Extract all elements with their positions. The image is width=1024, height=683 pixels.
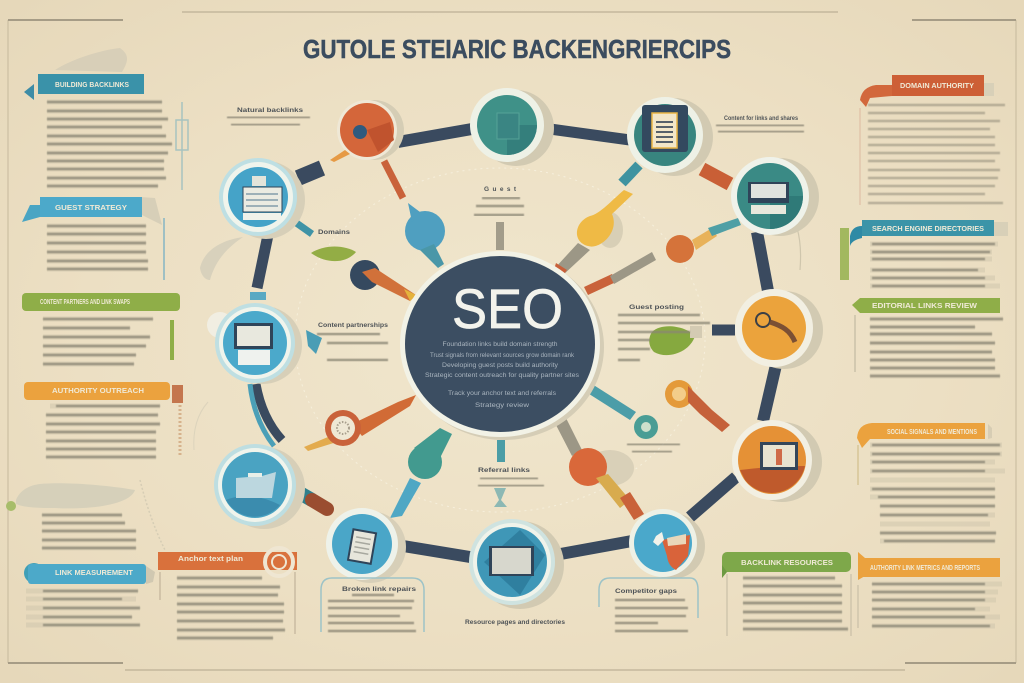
spoke: clock node xyxy=(304,395,416,451)
panel: green left: CONTENT PARTNERS AND LINK SWAPS xyxy=(40,299,130,306)
SEO body text: Developing guest posts build authority xyxy=(442,362,559,369)
panel: grey left xyxy=(6,480,165,550)
title: GUTOLE STEIARIC BACKENGRIERCIPS xyxy=(303,36,731,64)
panel: bottom box left xyxy=(321,578,424,632)
panel: red top right xyxy=(860,75,1005,205)
SEO body text: Trust signals from relevant sources grow domain rank xyxy=(430,352,575,359)
panel: green lower right: BACKLINK RESOURCES xyxy=(741,560,833,567)
callout: top-left xyxy=(227,107,310,125)
panel: orange lower right xyxy=(858,552,1002,628)
grey swoosh beside tablet hub xyxy=(200,237,243,280)
SEO heading: SEO xyxy=(452,277,563,340)
SEO body text: Foundation links build domain strength xyxy=(442,341,558,348)
panel: bottom box left: Broken link repairs xyxy=(342,586,416,593)
panel: blue lower left xyxy=(24,563,155,625)
hub: orange top-left xyxy=(330,100,404,162)
callout: teal node label xyxy=(627,444,680,452)
panel: green left xyxy=(22,293,180,364)
panel: green right xyxy=(852,298,1003,376)
panel: orange left xyxy=(24,382,183,457)
hub: teal top xyxy=(470,88,554,166)
callout: orange ball left label: Referral links xyxy=(478,467,530,474)
panel: green lower right xyxy=(722,552,851,636)
panel: orange lower right: AUTHORITY LINK METRICS AND REPORTS xyxy=(870,565,980,572)
callout: bottom center label: Resource pages and directories xyxy=(465,619,565,626)
callout: top-left: Natural backlinks xyxy=(237,107,303,114)
spoke: teal heart xyxy=(390,428,452,518)
hub: monitor teal xyxy=(731,157,819,236)
panel: orange lower center-left xyxy=(158,548,297,638)
panel: orange left: AUTHORITY OUTREACH xyxy=(52,388,144,395)
spoke: blue bulb xyxy=(384,161,445,268)
panel: teal right: SEARCH ENGINE DIRECTORIES xyxy=(872,226,984,233)
callout: tablet label xyxy=(317,322,388,360)
callout: leaf label xyxy=(314,229,364,239)
panel: red top right: DOMAIN AUTHORITY xyxy=(900,83,974,90)
SEO body text: Strategy review xyxy=(475,402,529,409)
teal tab right of tablet hub xyxy=(306,330,322,354)
faint curl left of folder hub xyxy=(194,402,208,450)
thin trailing line under monitor hub xyxy=(797,228,801,270)
callout: right of SEO xyxy=(618,304,710,360)
panel: blue left xyxy=(22,197,164,280)
spoke: teal stem and hourglass xyxy=(494,440,507,507)
panel: bottom box right: Competitor gaps xyxy=(615,588,677,595)
callout: bottom center label xyxy=(465,619,570,630)
panel: blue lower left: LINK MEASUREMENT xyxy=(55,570,134,577)
callout: doc hub label xyxy=(716,115,804,132)
callout: top center xyxy=(474,186,524,215)
panel: orange middle right xyxy=(857,423,1005,541)
panel: green right: EDITORIAL LINKS REVIEW xyxy=(872,303,977,310)
callout: top center: Guest xyxy=(484,186,517,193)
callout: leaf label: Domains xyxy=(318,229,350,236)
hub: blue monitor xyxy=(207,303,302,384)
panel: top-left teal xyxy=(24,48,188,190)
spoke: teal node xyxy=(586,384,658,439)
spoke: yellow bulb xyxy=(552,190,633,282)
hub: document teal xyxy=(627,97,713,176)
hub: blue document top-left xyxy=(219,158,305,239)
panel: blue left: GUEST STRATEGY xyxy=(55,205,127,212)
panel: bottom box right xyxy=(599,578,698,631)
callout: tablet label: Content partnerships xyxy=(318,322,388,329)
panel: orange lower center-left: Anchor text plan xyxy=(178,556,243,563)
SEO central hub xyxy=(400,251,604,440)
hub: orange magnifier xyxy=(735,289,823,369)
dashed inner orbit xyxy=(295,168,705,512)
SEO body text: Track your anchor text and referrals xyxy=(448,390,557,397)
spoke: orange ball xyxy=(556,418,644,520)
connectors: ring between hubs xyxy=(250,129,776,557)
callout: doc hub label: Content for links and shares xyxy=(724,115,798,122)
SEO body text xyxy=(425,341,580,409)
spoke: orange ring node xyxy=(665,380,730,432)
panel: teal right xyxy=(840,220,1008,286)
spoke: grey top stem xyxy=(496,222,504,250)
callout: right of SEO: Guest posting xyxy=(629,304,684,311)
panel: orange middle right: SOCIAL SIGNALS AND MENTIONS xyxy=(887,429,977,436)
hub: blue screen bottom xyxy=(469,519,564,609)
panel: top-left teal: BUILDING BACKLINKS xyxy=(55,82,129,89)
spoke: rust and orange blob xyxy=(584,218,741,295)
SEO body text: Strategic content outreach for quality partner sites xyxy=(425,372,580,379)
hub: blue map xyxy=(629,509,705,579)
hub: blue folder xyxy=(214,444,305,529)
hub: orange laptop xyxy=(732,420,822,502)
spoke: green blob xyxy=(649,326,702,355)
callout: orange ball left label xyxy=(478,467,544,486)
spoke: green leaf and navy node xyxy=(311,246,416,301)
hub: blue tablet xyxy=(326,508,406,583)
